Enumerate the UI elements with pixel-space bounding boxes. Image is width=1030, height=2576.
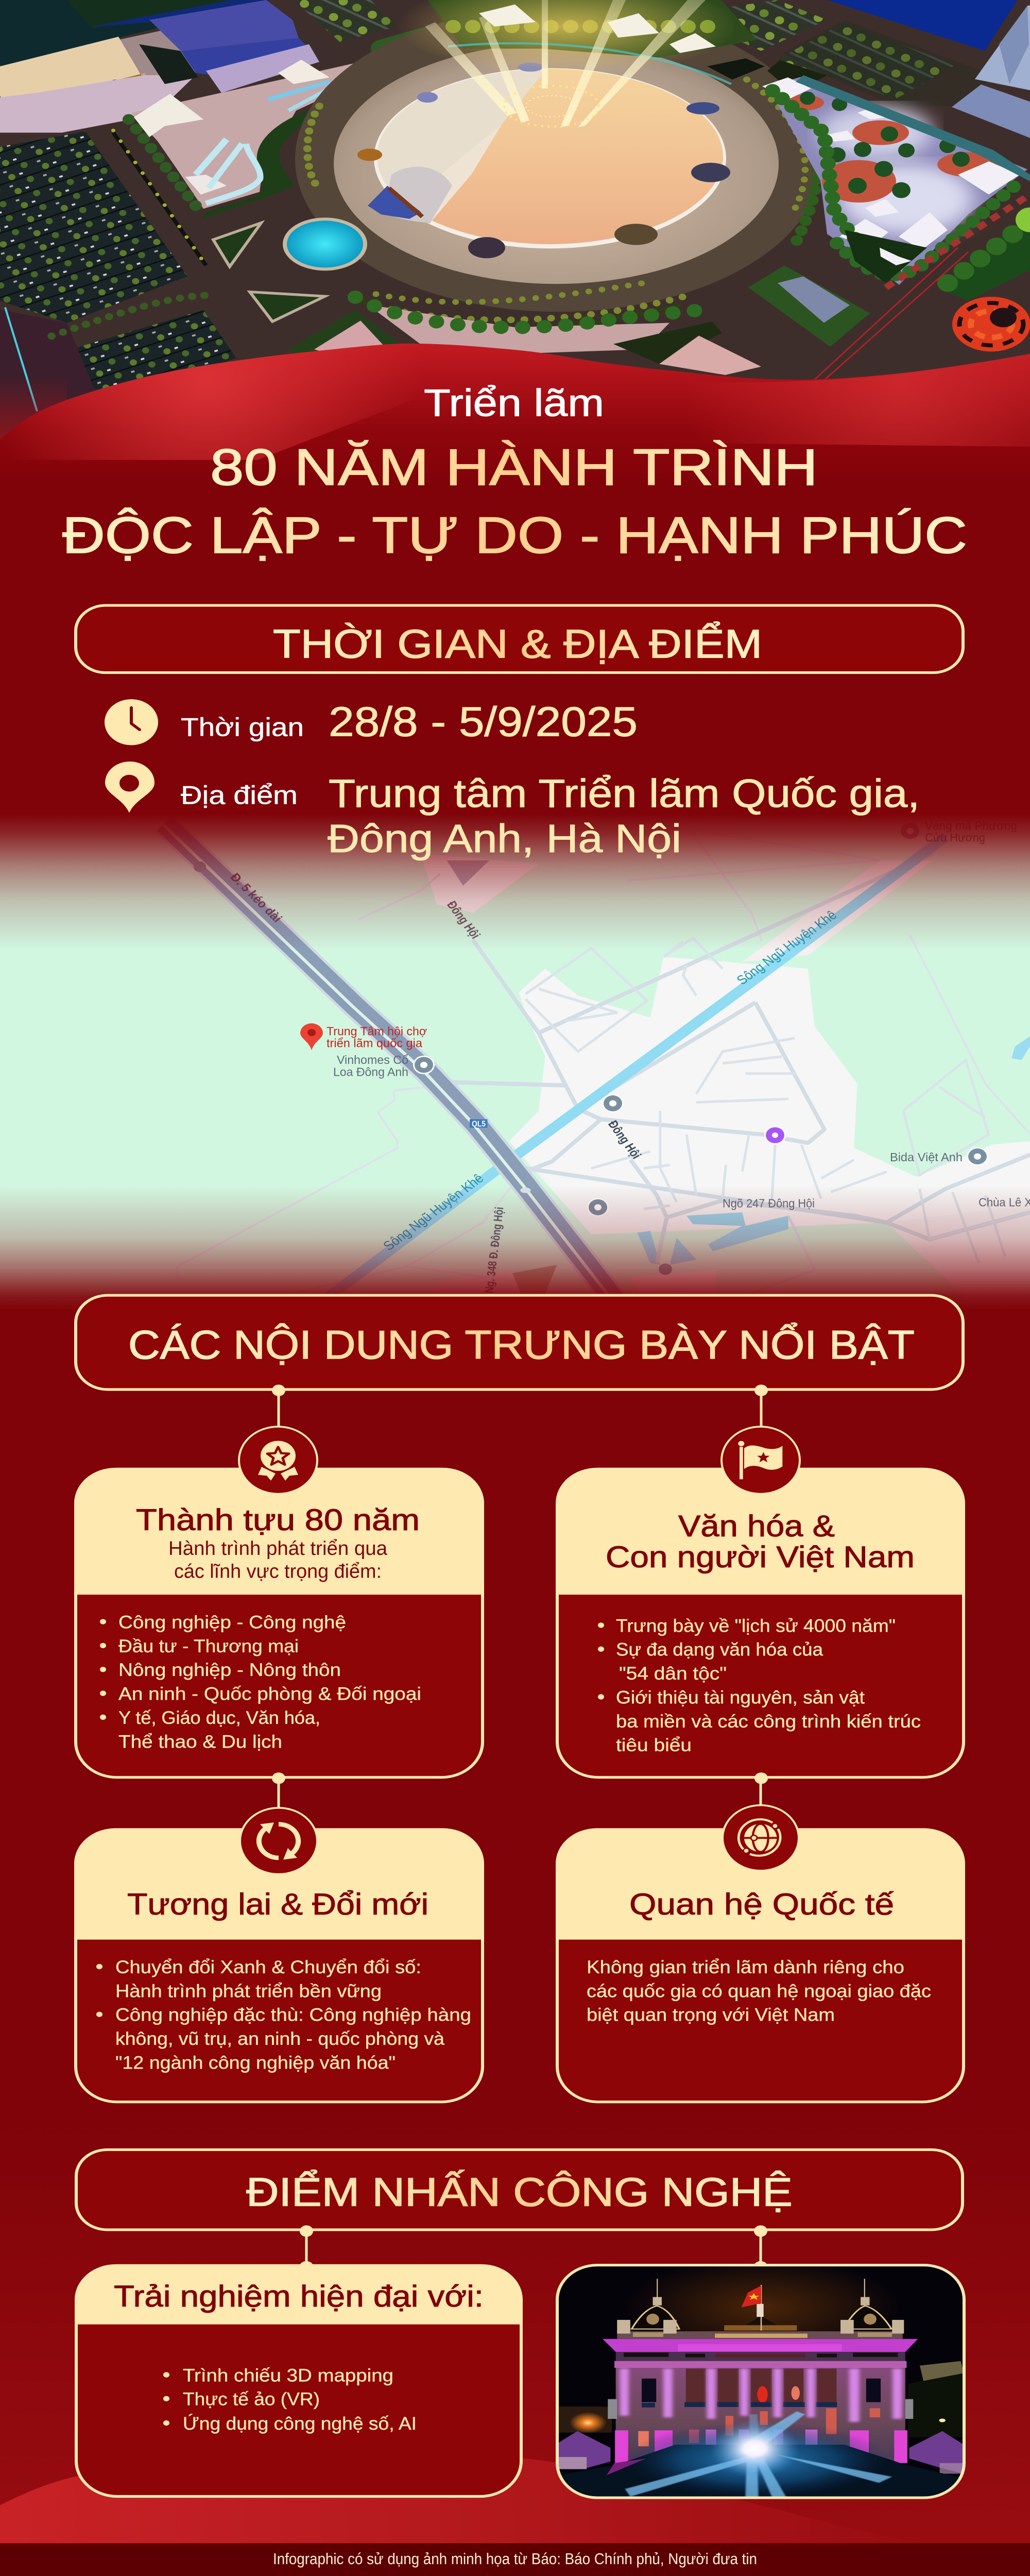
section heading: technology highlights <box>76 2150 963 2230</box>
time label: Thời gian <box>181 713 304 741</box>
bullet list: Y tế, Giáo dục, Văn hóa, <box>118 1708 320 1728</box>
flag <box>742 2285 761 2308</box>
icon: cycle arrows <box>240 1808 317 1874</box>
place value <box>328 771 920 861</box>
map: badges <box>470 1119 487 1128</box>
time row <box>105 699 638 745</box>
dome and plaza details <box>374 68 726 248</box>
cornice <box>603 2339 918 2352</box>
time value: 28/8 - 5/9/2025 <box>329 699 638 745</box>
description: Không gian triển lãm dành riêng cho <box>587 1957 904 1977</box>
place row <box>105 761 920 861</box>
description <box>587 1957 931 2025</box>
map: labels <box>227 819 1030 1294</box>
place label: Địa điểm <box>181 781 298 810</box>
icon: medal <box>239 1427 317 1494</box>
bullet list: "12 ngành công nghiệp văn hóa" <box>115 2053 396 2073</box>
bullet list: Nông nghiệp - Nông thôn <box>118 1660 341 1681</box>
heading: Con người Việt Nam <box>606 1540 915 1574</box>
map: labels: Sông Ngũ Huyện Khê <box>733 908 840 988</box>
bullet list: không, vũ trụ, an ninh - quốc phòng và <box>115 2029 445 2049</box>
map of the exhibition location <box>0 805 1030 1311</box>
tents <box>558 2431 610 2469</box>
map: red location pin <box>300 1023 323 1050</box>
heading: Trải nghiệm hiện đại với: <box>114 2280 484 2313</box>
subheading: Hành trình phát triển qua <box>168 1537 387 1559</box>
title: ĐỘC LẬP - TỰ DO - HẠNH PHÚC <box>62 506 967 564</box>
map: labels: Bida Việt Anh <box>890 1151 963 1164</box>
bullet list: An ninh - Quốc phòng & Đối ngoại <box>118 1684 421 1704</box>
bullet list: Thể thao & Du lịch <box>118 1732 282 1752</box>
panel: culture and people <box>556 1427 965 1777</box>
panel: future and innovation <box>74 1808 484 2102</box>
map: labels: Trung Tâm hội chợ <box>327 1025 427 1038</box>
bullet list: tiêu biểu <box>616 1735 692 1755</box>
map: labels: Đông Hội <box>605 1118 644 1161</box>
ground and light burst <box>558 2445 964 2500</box>
panel: achievements <box>74 1427 484 1777</box>
corner domes <box>631 2306 891 2329</box>
magenta pedestals <box>615 2430 907 2465</box>
heading: Tương lai & Đổi mới <box>127 1888 428 1921</box>
connectors between card rows <box>272 1772 768 1809</box>
bullet list: Công nghiệp đặc thù: Công nghiệp hàng <box>115 2005 471 2025</box>
map: labels: Đ. 5 kéo dài <box>227 871 285 925</box>
heading: Quan hệ Quốc tế <box>629 1888 894 1921</box>
bullet list: Trình chiếu 3D mapping <box>183 2365 393 2386</box>
description: biệt quan trọng với Việt Nam <box>587 2005 835 2025</box>
map: labels: Vinhomes Cổ <box>337 1054 408 1067</box>
connectors to technology cards <box>299 2225 768 2274</box>
bullet list <box>96 1957 471 2073</box>
connectors from heading to cards <box>272 1385 768 1429</box>
bullet list: Đầu tư - Thương mại <box>118 1636 299 1656</box>
heading <box>606 1510 915 1574</box>
bullet list: Sự đa dạng văn hóa của <box>616 1639 823 1660</box>
title <box>62 381 967 564</box>
map: river <box>329 837 946 1297</box>
red ribbon wave under the hero <box>0 344 1030 495</box>
bullet list <box>100 1612 421 1752</box>
map: faint lines <box>177 830 1030 1294</box>
place value: Trung tâm Triển lãm Quốc gia, <box>329 771 920 816</box>
section heading: time and place <box>76 605 963 673</box>
map: highway <box>162 823 617 1303</box>
heading: Thành tựu 80 năm <box>136 1503 420 1537</box>
map: labels: QL5 <box>472 1119 486 1128</box>
section heading: technology highlights: ĐIỂM NHẤN CÔNG NGHỆ <box>246 2170 793 2214</box>
section heading: time and place: THỜI GIAN & ĐỊA ĐIỂM <box>273 621 762 666</box>
balloon <box>952 297 1030 351</box>
place value: Đông Anh, Hà Nội <box>328 816 681 861</box>
subheading: các lĩnh vực trọng điểm: <box>174 1561 382 1582</box>
icon: location pin <box>105 761 154 813</box>
photo: Hanoi Opera House with 3D mapping <box>557 2258 964 2500</box>
title: 80 NĂM HÀNH TRÌNH <box>210 438 818 496</box>
bottom background wave <box>0 2114 1030 2543</box>
map: labels: Loa Đông Anh <box>333 1065 408 1079</box>
bullet list: Công nghiệp - Công nghệ <box>118 1612 346 1633</box>
bullet list: "54 dân tộc" <box>619 1664 727 1684</box>
map: labels: Ngõ 247 Đông Hội <box>723 1197 815 1210</box>
map: roads <box>443 854 1030 1263</box>
panel: international relations <box>556 1805 965 2102</box>
arched bays <box>686 2368 836 2402</box>
map: labels: triển lãm quốc gia <box>327 1037 422 1050</box>
map: urban zone <box>509 957 1030 1234</box>
icon: clock <box>105 699 158 745</box>
map: point markers <box>194 823 988 1275</box>
bullet list: Giới thiệu tài nguyên, sản vật <box>616 1687 865 1708</box>
pool <box>283 217 367 270</box>
bullet list: Ứng dụng công nghệ số, AI <box>183 2414 417 2434</box>
icon: flag <box>722 1427 800 1494</box>
description: các quốc gia có quan hệ ngoại giao đặc <box>587 1981 931 2002</box>
bullet list: Thực tế ảo (VR) <box>183 2389 320 2410</box>
title: Triển lãm <box>424 381 604 424</box>
glowing columns <box>620 2368 902 2422</box>
map: labels: Sông Ngũ Huyện Khê <box>380 1171 487 1253</box>
light beams over the dome <box>427 0 757 58</box>
hero aerial illustration of the exhibition centre <box>0 0 1030 447</box>
map: water ponds <box>637 1036 1030 1265</box>
panel: modern experience <box>75 2264 523 2496</box>
section heading: featured exhibits: CÁC NỘI DUNG TRƯNG BÀY NỔI BẬT <box>128 1322 915 1367</box>
icon: globe <box>723 1805 799 1871</box>
bullet list: Hành trình phát triển bền vững <box>115 1981 382 2002</box>
subheading <box>168 1537 387 1582</box>
map: labels: Cửu Hương <box>925 831 985 844</box>
section heading: featured exhibits <box>76 1295 963 1389</box>
bullet list: Trưng bày về "lịch sử 4000 năm" <box>616 1616 896 1636</box>
bullet list: ba miền và các công trình kiến trúc <box>616 1711 921 1732</box>
map: labels: Ng. 348 Đ. Đông Hội <box>483 1207 506 1294</box>
footer source credit <box>0 2543 1030 2576</box>
footer source credit: Infographic có sử dụng ảnh minh họa từ Báo: Báo Chính phủ, Người đưa tin <box>273 2550 757 2568</box>
bullet list: Chuyển đổi Xanh & Chuyển đổi số: <box>115 1957 421 1977</box>
map: labels: Đông Hội <box>444 899 483 941</box>
bullet list <box>598 1616 921 1755</box>
heading: Văn hóa & <box>678 1510 835 1543</box>
bullet list <box>163 2365 417 2434</box>
